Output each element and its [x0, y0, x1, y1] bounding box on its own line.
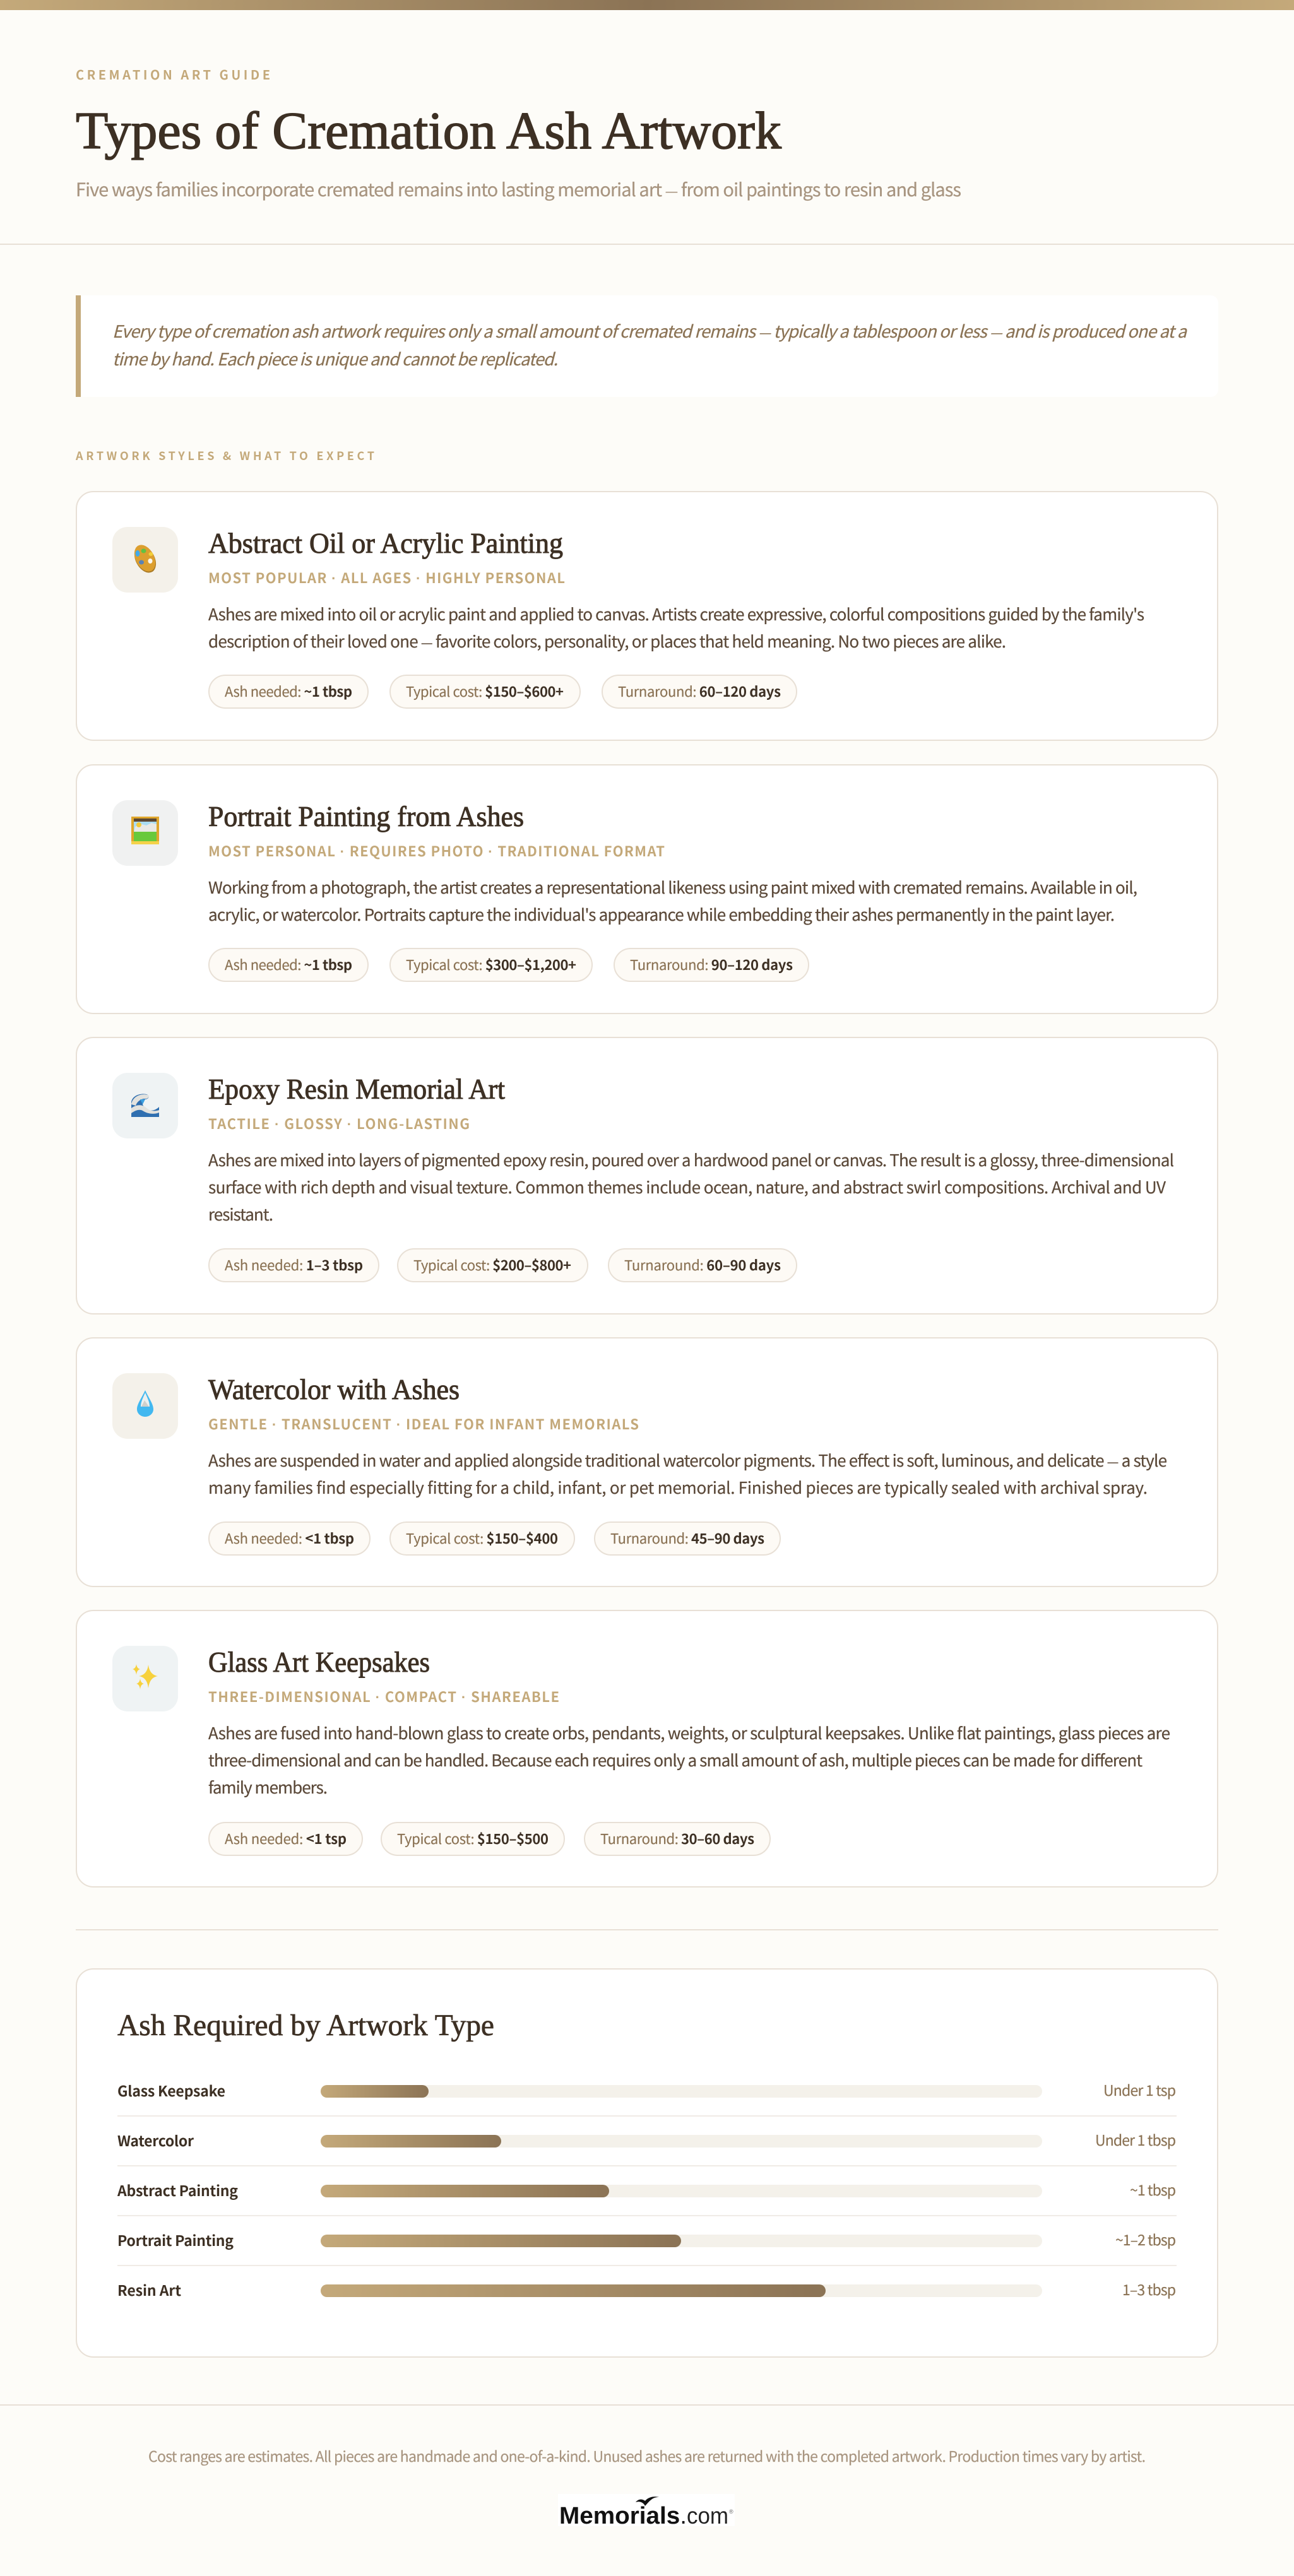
stat pills — [209, 948, 809, 981]
stat pills: Ash needed: 1–3 tbsp — [225, 1255, 363, 1275]
description: Ashes are suspended in water and applied alongside traditional watercolor pigments. The effect is soft, luminous, and delicate — a style — [208, 1448, 1167, 1472]
description: three-dimensional and can be handled. Because each requires only a small amount of ash, multiple pieces can be made for different — [208, 1748, 1143, 1771]
icon: sparkles — [112, 1646, 178, 1711]
logo: Memorials.com — [558, 2494, 735, 2529]
bar: portrait painting: ~1–2 tbsp — [1115, 2228, 1176, 2250]
stat pills — [209, 1249, 797, 1282]
tagline: THREE-DIMENSIONAL · COMPACT · SHAREABLE — [208, 1686, 559, 1706]
footnote: Cost ranges are estimates. All pieces are handmade and one-of-a-kind. Unused ashes are returned with the completed artwork. Production times vary by artist. — [148, 2445, 1146, 2466]
card title: Epoxy Resin Memorial Art — [208, 1073, 505, 1105]
stat pills: Ash needed: ~1 tbsp — [225, 681, 352, 701]
stat pills — [209, 1522, 780, 1555]
card title: Glass Art Keepsakes — [208, 1646, 430, 1678]
stat pills: Turnaround: 30–60 days — [600, 1828, 754, 1848]
icon: palette — [112, 527, 178, 593]
bar: portrait painting — [117, 2228, 1176, 2250]
bar: glass keepsake — [117, 2079, 1176, 2101]
title: Types of Cremation Ash Artwork — [76, 102, 781, 160]
panel: epoxy resin card — [76, 1037, 1218, 1314]
stat pills: Ash needed: <1 tsp — [225, 1828, 347, 1848]
stat pills: Typical cost: $200–$800+ — [413, 1255, 571, 1275]
tagline: GENTLE · TRANSLUCENT · IDEAL FOR INFANT MEMORIALS — [208, 1414, 639, 1434]
icon: droplet — [112, 1373, 178, 1439]
bar: resin art: 1–3 tbsp — [1122, 2278, 1176, 2300]
stat pills: Ash needed: <1 tbsp — [225, 1528, 354, 1548]
stat pills: Turnaround: 60–90 days — [624, 1255, 781, 1275]
stat pills: Turnaround: 60–120 days — [618, 681, 781, 701]
panel: abstract painting card — [76, 492, 1218, 740]
panel: portrait painting card — [76, 765, 1218, 1013]
card title: Watercolor with Ashes — [208, 1374, 460, 1405]
bar: watercolor — [117, 2129, 1176, 2151]
stat pills: Typical cost: $150–$500 — [397, 1828, 549, 1848]
bar: watercolor: Watercolor — [117, 2129, 194, 2151]
stat pills: Ash needed: ~1 tbsp — [225, 954, 352, 974]
card title: Portrait Painting from Ashes — [208, 801, 524, 832]
description: Ashes are mixed into oil or acrylic paint and applied to canvas. Artists create expressive, colorful compositions guided by the family's — [208, 602, 1144, 625]
stat pills — [209, 675, 797, 708]
description: acrylic, or watercolor. Portraits capture the individual's appearance while embedding their ashes permanently in the paint layer. — [208, 902, 1115, 926]
logo: Memorials.com: ® — [729, 2508, 733, 2515]
description — [208, 602, 1144, 653]
tagline: MOST PERSONAL · REQUIRES PHOTO · TRADITIONAL FORMAT — [208, 841, 665, 861]
bar: abstract painting: ~1 tbsp — [1130, 2178, 1176, 2200]
section label: ARTWORK STYLES & WHAT TO EXPECT — [75, 447, 374, 464]
description: Ashes are mixed into layers of pigmented epoxy resin, poured over a hardwood panel or canvas. The result is a glossy, three-dimensional — [208, 1148, 1174, 1171]
panel: glass art card — [76, 1610, 1218, 1887]
callout: Every type of cremation ash artwork requires only a small amount of cremated remains — typically a tablespoon or less — and is produced one at a — [112, 318, 1188, 343]
stat pills: Typical cost: $150–$400 — [406, 1528, 558, 1548]
bar: watercolor: Under 1 tbsp — [1095, 2129, 1176, 2150]
bar: glass keepsake: Glass Keepsake — [117, 2079, 225, 2101]
description — [208, 1721, 1170, 1799]
callout: time by hand. Each piece is unique and cannot be replicated. — [112, 346, 558, 370]
subtitle: Five ways families incorporate cremated remains into lasting memorial art — from oil paintings to resin and glass — [76, 175, 961, 202]
description — [208, 1448, 1167, 1499]
bar: abstract painting: Abstract Painting — [117, 2179, 238, 2201]
icon: framed picture — [112, 800, 178, 866]
stat pills: Typical cost: $300–$1,200+ — [406, 954, 576, 974]
panel: watercolor card — [76, 1338, 1218, 1586]
bar: abstract painting — [117, 2178, 1176, 2201]
panel: ash required chart — [76, 1969, 1218, 2357]
tagline: TACTILE · GLOSSY · LONG-LASTING — [208, 1113, 470, 1133]
description: Ashes are fused into hand-blown glass to create orbs, pendants, weights, or sculptural keepsakes. Unlike flat paintings, glass pieces are — [208, 1721, 1170, 1744]
logo: Memorials.com: Memorials. — [559, 2503, 687, 2529]
header — [76, 65, 961, 202]
bar: resin art: Resin Art — [117, 2279, 181, 2300]
icon: wave — [112, 1073, 178, 1138]
logo: Memorials.com: com — [687, 2503, 728, 2529]
description: surface with rich depth and visual texture. Common themes include ocean, nature, and abstract swirl compositions. Archival and UV — [208, 1175, 1166, 1198]
tagline: MOST POPULAR · ALL AGES · HIGHLY PERSONAL — [208, 567, 565, 588]
stat pills: Typical cost: $150–$600+ — [406, 681, 564, 701]
card title: Abstract Oil or Acrylic Painting — [208, 528, 563, 559]
stat pills: Turnaround: 45–90 days — [610, 1528, 764, 1548]
eyebrow: CREMATION ART GUIDE — [76, 65, 270, 83]
bar: glass keepsake: Under 1 tsp — [1103, 2079, 1176, 2100]
description: resistant. — [208, 1202, 273, 1226]
description: many families find especially fitting for a child, infant, or pet memorial. Finished pieces are typically sealed with archival spray. — [208, 1475, 1148, 1499]
stat pills: Turnaround: 90–120 days — [630, 954, 793, 974]
stat pills — [209, 1823, 770, 1855]
top accent bar — [0, 0, 1294, 10]
description: family members. — [208, 1775, 328, 1799]
bar: portrait painting: Portrait Painting — [117, 2229, 234, 2250]
chart title: Ash Required by Artwork Type — [117, 2009, 494, 2042]
description — [208, 875, 1137, 926]
callout — [76, 295, 1218, 397]
description: Working from a photograph, the artist creates a representational likeness using paint mixed with cremated remains. Available in oil, — [208, 875, 1137, 899]
description — [208, 1148, 1174, 1226]
bar: resin art — [117, 2278, 1176, 2300]
description: description of their loved one — favorite colors, personality, or places that held meaning. No two pieces are alike. — [208, 629, 1006, 653]
